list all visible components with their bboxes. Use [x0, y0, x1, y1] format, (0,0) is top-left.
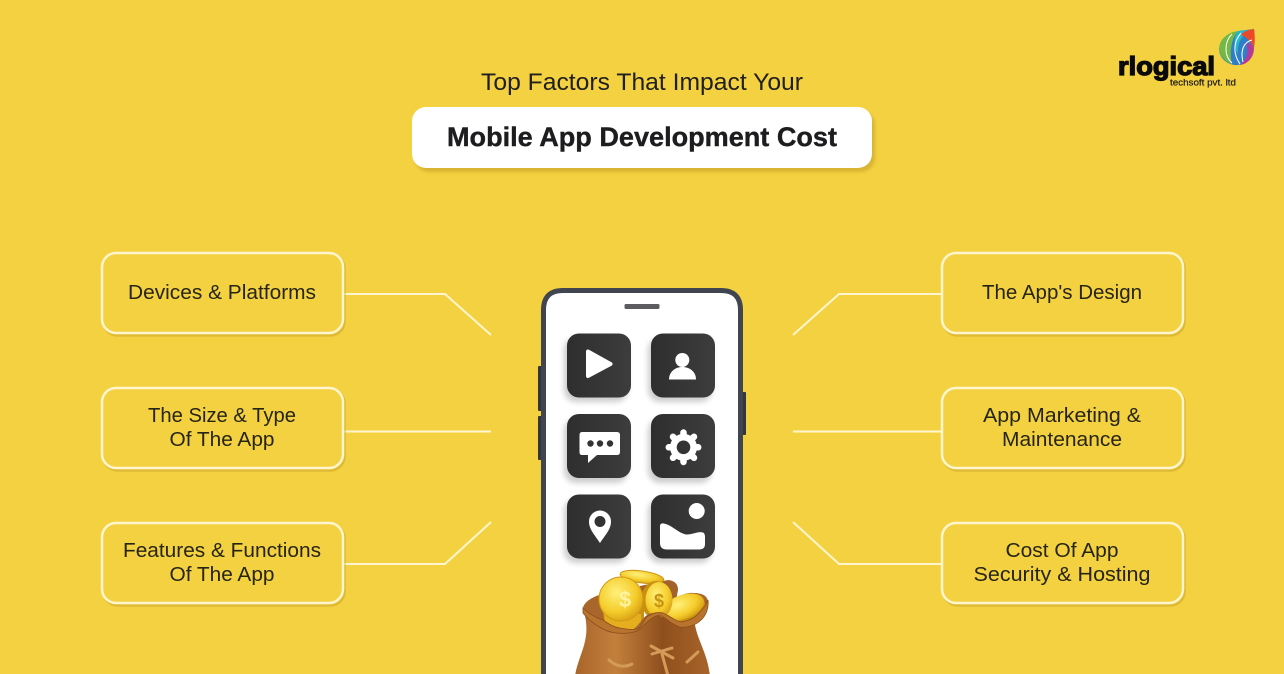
logo tagline: techsoft pvt. ltd [1170, 78, 1236, 88]
phone [538, 290, 746, 674]
bag body [575, 612, 710, 674]
left connectors [343, 294, 491, 564]
logo [1118, 29, 1255, 88]
money bag [575, 568, 710, 674]
box: App Marketing & Maintenance: Maintenance [1002, 429, 1122, 451]
box: Devices & Platforms [102, 253, 344, 336]
box: Devices & Platforms: Devices & Platforms [128, 282, 316, 304]
bag drawstring [609, 646, 698, 674]
logo wordmark: rlogical [1118, 51, 1215, 81]
heading pill: Mobile App Development Cost [447, 122, 837, 152]
box: The Size & Type Of The App: The Size & Type [148, 405, 296, 427]
title line: Top Factors That Impact Your [481, 69, 803, 96]
phone speaker [624, 304, 660, 309]
coin: top flat [619, 568, 665, 586]
coin: right [657, 588, 709, 630]
icon: location pin [567, 494, 631, 558]
box: The App's Design: The App's Design [982, 282, 1142, 304]
icon: chat [567, 414, 631, 478]
logo leaf icon [1219, 29, 1255, 65]
bag back rim right [640, 580, 678, 606]
bag back rim left [583, 594, 612, 625]
box: App Marketing & Maintenance: App Marketing & [983, 405, 1142, 427]
box: The App's Design [942, 253, 1184, 336]
phone side buttons [538, 366, 746, 460]
box: Cost Of App Security & Hosting [942, 523, 1184, 606]
box: Features & Functions Of The App: Of The App [170, 564, 274, 586]
heading pill [412, 107, 875, 172]
box: Cost Of App Security & Hosting: Cost Of App [1006, 540, 1118, 562]
bag right ear [672, 593, 708, 622]
box: App Marketing & Maintenance [942, 388, 1184, 470]
box: Features & Functions Of The App: Features & Functions [123, 540, 321, 562]
coin stack [601, 600, 644, 632]
icon: user [651, 334, 715, 398]
phone body [544, 290, 740, 674]
box: The Size & Type Of The App: Of The App [170, 429, 274, 451]
icon: play [567, 334, 631, 398]
icon: gear [651, 414, 715, 478]
bag rim [583, 600, 708, 633]
icon tile shadows [564, 338, 712, 563]
icon: image [651, 494, 715, 558]
coin: side: $ [654, 591, 664, 611]
coin: large dollar: $ [619, 587, 631, 612]
box: Features & Functions Of The App [102, 523, 344, 606]
box: Cost Of App Security & Hosting: Security & Hosting [974, 564, 1150, 586]
right connectors [793, 294, 941, 564]
box: The Size & Type Of The App [102, 388, 344, 470]
